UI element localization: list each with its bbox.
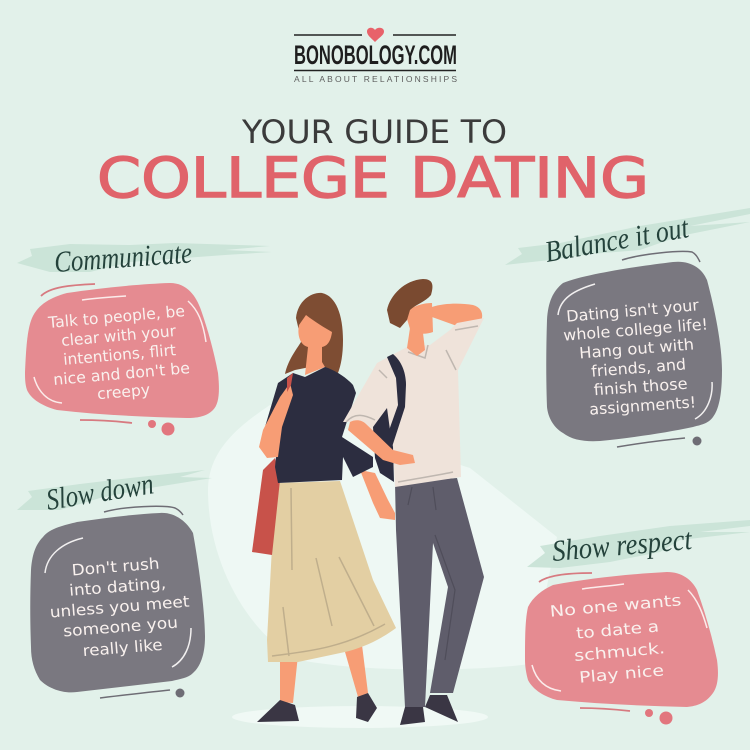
hair	[387, 279, 432, 328]
bubble	[30, 513, 205, 692]
panel: communicate	[17, 236, 272, 436]
figure: woman	[252, 293, 396, 722]
title line two: COLLEGE DATING	[97, 146, 649, 210]
bubble	[525, 572, 718, 707]
heading: show respect: Show respect	[551, 523, 694, 568]
bubble text: creepy	[96, 381, 151, 403]
icon: heart	[367, 28, 384, 42]
bubble text: clear with your	[60, 322, 177, 350]
decorative dot	[176, 688, 184, 698]
near arm	[259, 383, 293, 458]
blouse	[262, 367, 373, 483]
hair	[285, 293, 343, 374]
brush stroke	[505, 208, 750, 265]
bubble text: Hang out with	[579, 336, 695, 362]
bubble	[546, 262, 722, 441]
bubble text: Don't rush	[71, 555, 160, 579]
neck	[407, 328, 425, 356]
brush stroke	[17, 243, 272, 272]
decorative dots	[645, 709, 672, 724]
title line one: YOUR GUIDE TO	[241, 113, 507, 151]
face	[405, 303, 433, 334]
bubble text: Play nice	[578, 661, 665, 687]
shoes	[400, 695, 458, 725]
logo wordmark: BONOBOLOGY.COM	[294, 40, 457, 70]
skirt	[267, 481, 396, 662]
panel: show respect	[525, 520, 750, 724]
panel: balance it out	[505, 208, 750, 447]
far arm	[360, 470, 395, 520]
bag strap	[287, 373, 293, 392]
panel: slow down	[17, 467, 212, 698]
face and neck	[298, 315, 332, 375]
decorative dot	[692, 436, 702, 446]
bubble text	[563, 296, 709, 419]
bubble text: really like	[82, 636, 163, 660]
heading: slow down: Slow down	[44, 467, 156, 517]
backpack	[373, 408, 394, 482]
shoes	[257, 693, 377, 722]
background light shape	[208, 405, 557, 670]
bubble text: assignments!	[589, 393, 697, 419]
bubble text: Talk to people, be	[47, 302, 186, 332]
bubble text: whole college life!	[563, 315, 709, 345]
bubble text: Dating isn't your	[566, 296, 700, 326]
bubble text	[549, 591, 682, 687]
heading: communicate: Communicate	[53, 236, 193, 279]
raised arm	[432, 304, 482, 326]
bubble text: unless you meet	[49, 593, 190, 621]
bubble text: No one wants	[549, 591, 682, 621]
forearm	[348, 420, 415, 465]
bubble text	[49, 555, 190, 660]
bubble text: nice and don't be	[53, 359, 191, 389]
heading: balance it out: Balance it out	[542, 211, 692, 269]
trousers	[395, 478, 484, 707]
decorative dots	[148, 420, 174, 436]
ground shadow	[232, 706, 488, 728]
bubble	[25, 283, 219, 418]
handbag	[252, 458, 280, 555]
bubble text: someone you	[63, 614, 179, 640]
bubble text	[47, 302, 191, 403]
brush stroke	[17, 470, 212, 510]
bubble text: finish those	[593, 375, 688, 399]
bubble text: into dating,	[69, 574, 167, 600]
figure: man	[343, 279, 484, 725]
brush stroke	[527, 520, 750, 568]
logo tagline: ALL ABOUT RELATIONSHIPS	[294, 74, 457, 84]
legs	[280, 645, 368, 703]
bubble text: intentions, flirt	[62, 341, 177, 369]
bubble text: friends, and	[591, 355, 687, 381]
backpack strap	[387, 354, 406, 447]
bubble text: schmuck.	[573, 639, 666, 665]
shirt	[343, 318, 484, 487]
logo	[294, 28, 457, 84]
bubble text: to date a	[575, 617, 660, 643]
